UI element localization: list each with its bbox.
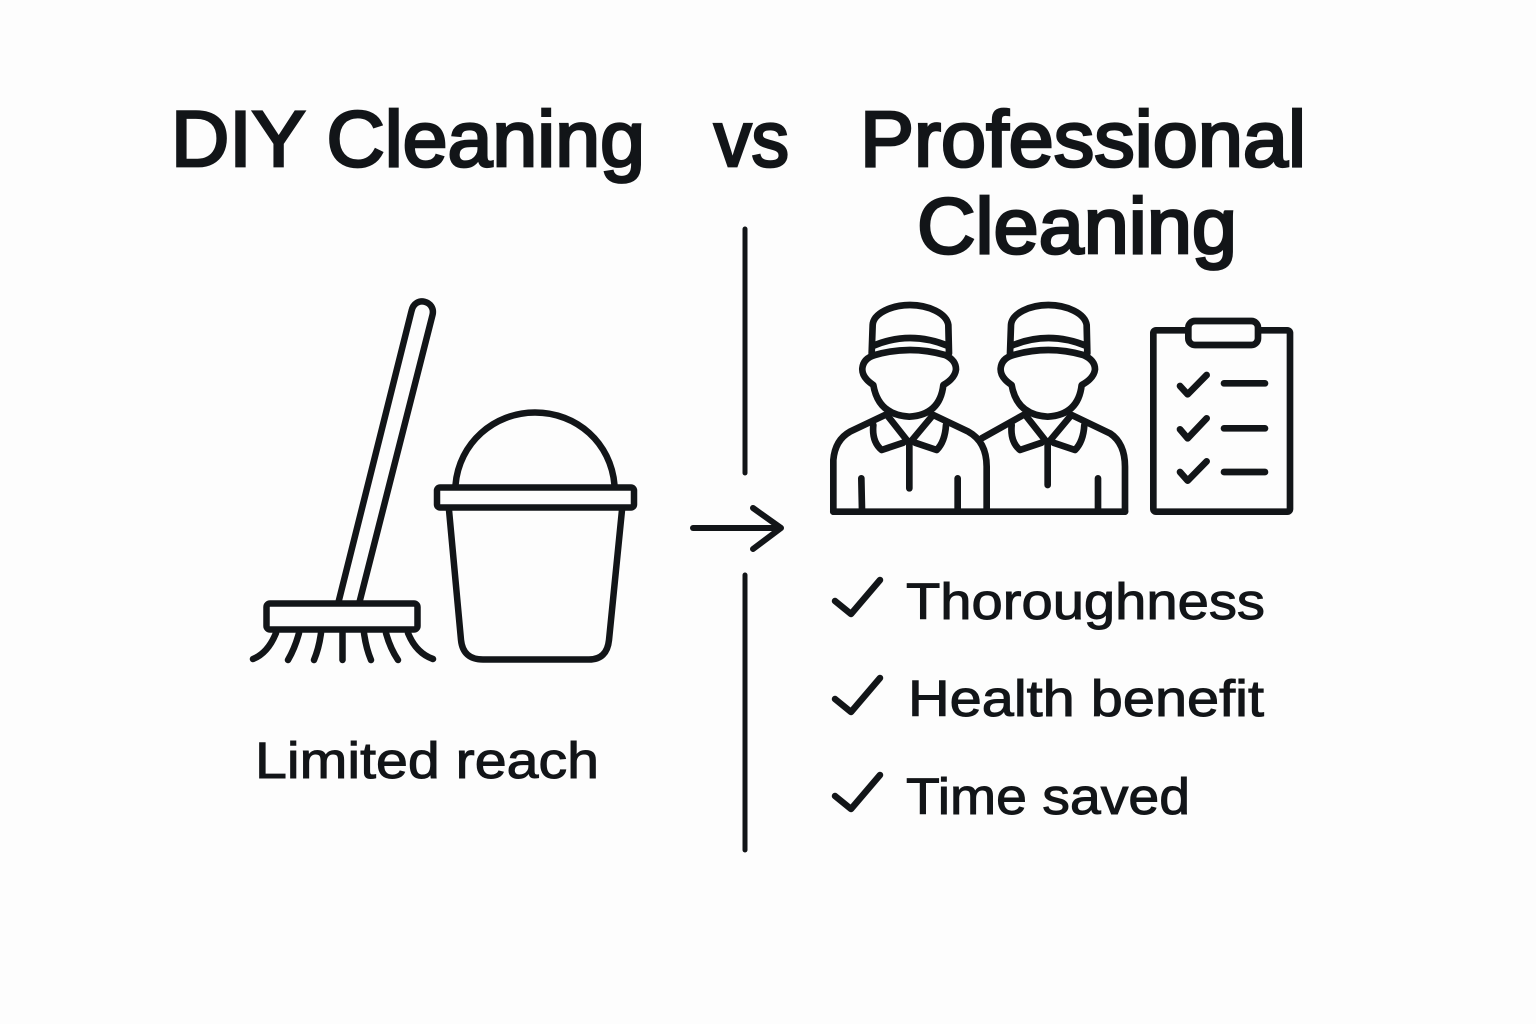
heading: Professional Cleaning: Professional (860, 94, 1306, 183)
heading: Professional Cleaning: Cleaning (917, 181, 1237, 270)
icon: arrow (693, 508, 781, 549)
heading: DIY Cleaning: DIY Cleaning (171, 94, 645, 183)
heading: vs: vs (714, 94, 789, 183)
benefit: Thoroughness: Thoroughness (906, 573, 1265, 630)
worker one (833, 305, 987, 512)
heading: Professional Cleaning (860, 94, 1306, 270)
icon: two cleaning workers (833, 305, 1125, 512)
center divider (742, 229, 748, 850)
icon: clipboard checklist (1153, 321, 1290, 512)
benefit: Health benefit: Health benefit (908, 670, 1264, 727)
benefit: Time saved: Time saved (906, 768, 1190, 825)
worker two (982, 305, 1125, 512)
label: Limited reach: Limited reach (255, 732, 599, 789)
icon: bucket (437, 412, 634, 660)
icon: mop (253, 301, 433, 660)
base line (833, 502, 1125, 522)
